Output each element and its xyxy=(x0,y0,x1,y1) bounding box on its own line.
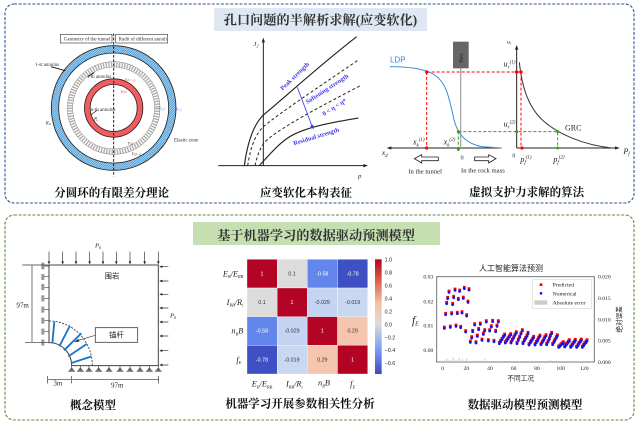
colour bar labels: 0.6 xyxy=(385,283,392,289)
x axis ticks: 40 xyxy=(487,366,493,372)
curve and axis labels: 0 xyxy=(461,155,464,161)
axis labels: J₂ xyxy=(253,41,259,48)
y axis labels: RB xyxy=(237,274,244,279)
left axis ticks: 0.01 xyxy=(423,324,433,330)
legend: Predicted xyxy=(553,283,574,289)
green guide lines xyxy=(458,132,558,149)
x axis labels: f xyxy=(350,380,353,389)
geometry header boxes xyxy=(60,34,168,43)
curve and axis labels: r xyxy=(508,66,510,71)
annulus labels: r₍₂₎ xyxy=(159,107,165,112)
absolute error bars xyxy=(442,357,573,362)
colour bar labels: −0.4 xyxy=(385,348,395,354)
cell values: -0.58 xyxy=(256,329,268,335)
left axis ticks: 0.00 xyxy=(423,348,433,354)
curve and axis labels: r xyxy=(508,126,510,131)
GRC curve xyxy=(519,62,612,148)
LDP curve xyxy=(390,67,502,148)
curve and axis labels: p xyxy=(520,155,524,164)
x axis ticks xyxy=(441,366,589,372)
legend: Numerical xyxy=(553,291,577,297)
direction labels: In the rock mass xyxy=(461,168,505,175)
curve and axis labels xyxy=(390,39,630,166)
axis label: xd: x xyxy=(382,149,385,157)
x axis labels: B xyxy=(325,379,330,388)
x axis labels: R xyxy=(321,383,325,388)
curve and axis labels: f xyxy=(628,153,630,158)
right arrow heads xyxy=(159,265,162,366)
annulus labels: Rₚ xyxy=(45,121,52,126)
model boundary xyxy=(49,265,158,366)
y axis labels: B xyxy=(238,327,243,336)
axis titles xyxy=(412,306,623,383)
axis labels xyxy=(253,41,362,180)
cell values: -0.78 xyxy=(347,271,359,277)
dimension labels: 3m xyxy=(53,380,63,388)
left axis ticks: 0.02 xyxy=(423,299,433,305)
cell values: 1 xyxy=(351,357,354,363)
annulus labels: r₍ᵢ₎ xyxy=(128,141,133,146)
axis titles: 不同工况 xyxy=(507,375,534,383)
y axis labels: /E xyxy=(230,269,238,278)
caption: 机器学习开展参数相关性分析 xyxy=(225,397,375,411)
curve and axis labels: LDP xyxy=(390,55,406,64)
heading: machine learning model xyxy=(193,222,440,245)
direction arrows xyxy=(414,155,496,163)
annulus labels: 1-st annulus xyxy=(35,63,59,68)
curve labels: Peak strength xyxy=(279,61,311,92)
x axis labels: I xyxy=(286,380,289,389)
bottom supports xyxy=(68,366,162,371)
colour bar labels: 0.4 xyxy=(385,296,392,302)
axis titles: 绝对误差 xyxy=(614,306,623,333)
face marker xyxy=(453,42,469,148)
curve and axis labels: (2) xyxy=(449,138,456,143)
diagram: annulus finite difference xyxy=(35,33,199,199)
right axis ticks: 0.000 xyxy=(598,360,611,366)
curve and axis labels: (2) xyxy=(510,120,516,125)
plot frame xyxy=(437,277,594,362)
curve and axis labels: k xyxy=(417,143,420,148)
curve and axis labels: r xyxy=(510,41,512,46)
colour bar labels: −0.2 xyxy=(385,335,395,341)
softening strength curves xyxy=(248,60,362,166)
y axis labels: R xyxy=(227,274,231,279)
x axis labels: RB xyxy=(288,384,294,389)
curve and axis labels: (1) xyxy=(419,138,425,143)
colour bar labels: 1.0 xyxy=(385,258,392,264)
axes xyxy=(387,45,620,150)
cell values: 0.29 xyxy=(347,329,358,335)
chart: virtual support force algorithm xyxy=(387,39,630,199)
curve and axis labels: u xyxy=(504,60,508,69)
predicted points xyxy=(444,287,587,346)
x axis labels: /E xyxy=(259,380,267,389)
geometry header boxes: Radii of different annuli xyxy=(119,37,167,42)
left supports xyxy=(41,263,49,346)
cell values: 1 xyxy=(291,300,294,306)
heading: machine learning model: 基于机器学习的数据驱动预测模型 xyxy=(217,227,415,243)
annulus labels: r₍₁₎ xyxy=(176,108,182,113)
top load arrows xyxy=(49,252,158,263)
numerical points xyxy=(444,289,587,347)
cell values: -0.029 xyxy=(315,300,330,306)
axis titles: f xyxy=(412,315,415,327)
y axis labels: /R xyxy=(234,298,242,307)
cell values: -0.58 xyxy=(316,271,328,277)
load labels xyxy=(94,243,177,320)
softening arrow xyxy=(297,87,314,129)
curve labels: Softening strength xyxy=(305,73,350,106)
y axis labels: n xyxy=(231,327,236,336)
face marker: Face xyxy=(459,52,464,63)
colour bar labels: −0.6 xyxy=(385,361,395,367)
caption: 应变软化本构表征 xyxy=(260,186,352,200)
x axis labels: R xyxy=(256,384,260,389)
x axis ticks: 20 xyxy=(464,366,469,372)
residual strength curve xyxy=(259,118,358,166)
direction labels: In the tunnel xyxy=(408,168,442,175)
legend xyxy=(532,280,591,308)
x axis labels: /R xyxy=(293,380,301,389)
dimension labels: 97m xyxy=(111,382,124,390)
curve and axis labels: x xyxy=(413,137,417,146)
axis titles: E xyxy=(414,321,419,327)
curve and axis labels: P xyxy=(623,147,628,156)
red inner annulus xyxy=(87,82,140,134)
cell values: 0.1 xyxy=(288,271,296,277)
bolt label: 锚杆 xyxy=(109,331,124,340)
blue bolts xyxy=(52,322,91,363)
curve and axis labels: x xyxy=(444,137,447,146)
right load arrows xyxy=(161,267,168,365)
right axis ticks xyxy=(598,275,611,366)
diagram: conceptual model xyxy=(16,243,177,412)
annulus labels: Elastic zone xyxy=(174,139,199,144)
right axis ticks: 0.015 xyxy=(598,296,611,302)
y axis labels: R xyxy=(235,331,239,336)
x axis ticks: 100 xyxy=(556,366,565,372)
curve labels: Residual strength xyxy=(293,127,340,147)
hatched outer annulus xyxy=(51,46,176,170)
cell values: 1 xyxy=(321,329,324,335)
curve and axis labels: (2) xyxy=(559,156,565,161)
colour bar labels: 0.2 xyxy=(385,309,392,315)
curve and axis labels: f xyxy=(557,161,559,166)
cell values: -0.029 xyxy=(284,329,300,335)
annulus labels: r₍ₙ₎ xyxy=(121,90,127,95)
caption: 概念模型 xyxy=(70,398,116,412)
colour bar labels: 0.8 xyxy=(385,270,392,276)
y axis labels: f xyxy=(236,355,239,364)
curve and axis labels: u xyxy=(504,120,508,129)
x axis ticks: 80 xyxy=(534,366,540,372)
load labels: P₀ xyxy=(94,243,102,250)
colour bar labels xyxy=(385,258,395,367)
curve and axis labels: (1) xyxy=(510,60,516,65)
dimension labels: 97m xyxy=(16,301,29,309)
x axis labels: E xyxy=(352,384,356,389)
axes xyxy=(218,38,368,167)
panel: analytical solution xyxy=(5,4,634,203)
plastic zone arc xyxy=(49,321,92,366)
chart title: 人工智能算法预测 xyxy=(479,263,543,273)
chart: correlation heatmap xyxy=(222,258,395,411)
curve and axis labels: GRC xyxy=(565,124,581,133)
x axis labels: RB xyxy=(266,384,273,389)
y axis labels: I xyxy=(227,298,229,307)
annulus labels xyxy=(35,63,199,157)
chart: strain-softening constitutive curves xyxy=(218,37,368,200)
right axis ticks: 0.005 xyxy=(598,339,611,345)
axis label: xd: d xyxy=(385,154,388,159)
curve and axis labels: 0 xyxy=(512,153,515,159)
rock label: 围岩 xyxy=(105,271,119,280)
annulus labels: n-th annulus xyxy=(91,108,116,113)
caption: 数据驱动模型预测模型 xyxy=(468,398,583,412)
caption: 虚拟支护力求解的算法 xyxy=(469,185,586,199)
left axis ticks xyxy=(423,275,433,354)
cell values: 0.1 xyxy=(258,300,266,306)
colour bar labels: 0.0 xyxy=(385,322,392,328)
cell values: -0.019 xyxy=(284,357,300,363)
axis labels: p xyxy=(357,173,362,180)
x axis ticks: 60 xyxy=(511,366,517,372)
x axis labels: n xyxy=(318,379,322,388)
annulus labels: i-th annulus xyxy=(88,75,111,80)
chart: prediction scatter xyxy=(412,263,623,412)
dotted middle annulus xyxy=(67,62,160,154)
dimension lines xyxy=(22,265,159,383)
heading: analytical solution xyxy=(214,8,427,31)
curve labels xyxy=(279,61,350,147)
y axis labels xyxy=(222,269,244,365)
x axis ticks: 120 xyxy=(580,366,589,372)
heading: analytical solution: 孔口问题的半解析求解(应变软化) xyxy=(224,12,417,28)
y axis labels: RB xyxy=(228,303,235,308)
curve and axis labels: p xyxy=(553,155,557,164)
peak strength curve xyxy=(244,37,357,166)
panel: data-driven model xyxy=(5,215,634,420)
colour bar xyxy=(375,259,382,374)
curve and axis labels: k xyxy=(447,143,450,148)
dimension labels xyxy=(16,301,124,390)
geometry header boxes: Geometry of the tunnel xyxy=(64,37,111,42)
x axis labels: E xyxy=(252,380,257,389)
annulus labels: R₁ xyxy=(93,118,99,123)
cell values: -0.019 xyxy=(345,300,360,306)
red guide lines xyxy=(427,72,522,148)
annulus labels: r₍ₙ₋₁₎ xyxy=(125,78,135,83)
cell values: 0.29 xyxy=(317,357,328,363)
cell values: -0.78 xyxy=(256,357,268,363)
top arrow heads xyxy=(48,261,160,264)
curve labels: 0 < η < η* xyxy=(321,97,348,118)
direction labels xyxy=(408,168,505,175)
cell values xyxy=(256,271,360,363)
curve and axis labels: f xyxy=(524,161,526,166)
annulus labels: r₍ᵢ₊₁₎ xyxy=(132,152,141,157)
bolt label xyxy=(74,328,138,342)
y axis labels: t xyxy=(242,303,244,308)
curve and axis labels: u xyxy=(507,39,510,45)
axis line xyxy=(112,33,115,177)
right axis ticks: 0.010 xyxy=(598,317,611,323)
legend: Absolute error xyxy=(553,300,586,306)
left axis ticks: 0.03 xyxy=(423,275,433,281)
x axis ticks: 0 xyxy=(441,366,444,372)
x axis labels xyxy=(251,379,356,389)
y axis labels: E xyxy=(223,269,228,278)
x axis labels: t xyxy=(301,384,303,389)
right axis ticks: 0.020 xyxy=(598,275,611,281)
curve and axis labels: (1) xyxy=(526,156,532,161)
y axis labels: E xyxy=(238,360,242,365)
cell values: 1 xyxy=(261,271,264,277)
load labels: P₀ xyxy=(169,313,177,320)
caption: 分圆环的有限差分理论 xyxy=(54,185,170,199)
heatmap cells xyxy=(247,259,368,374)
